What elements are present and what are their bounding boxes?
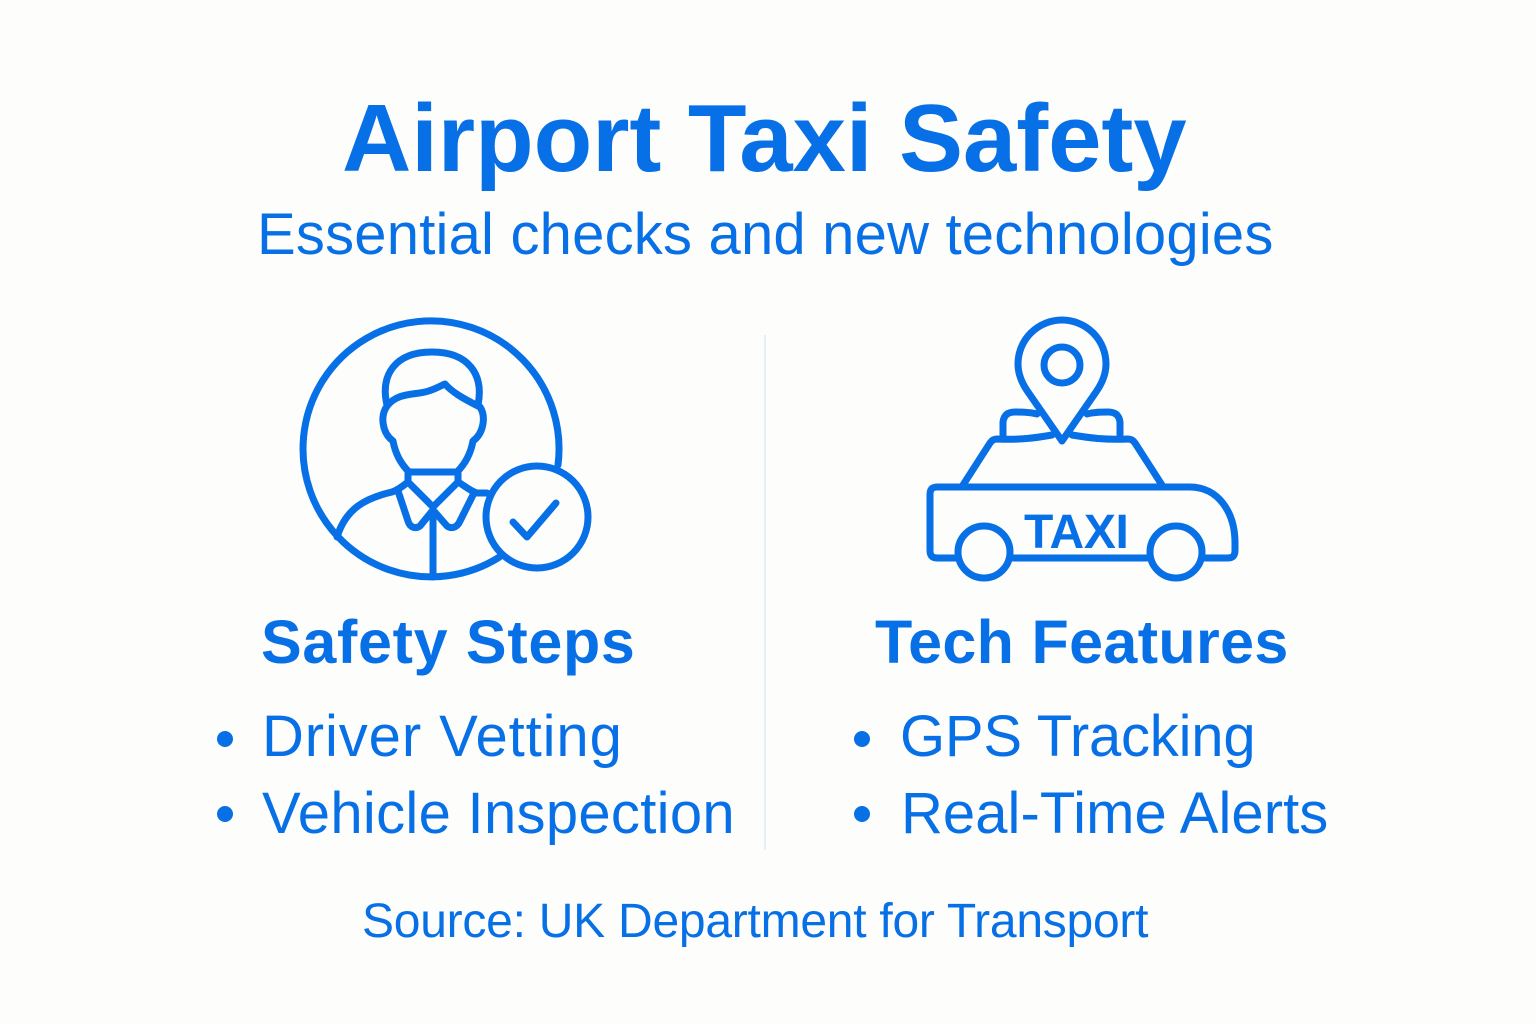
heading: tech features: Tech Features <box>875 608 1289 676</box>
subtitle: Essential checks and new technologies <box>257 202 1274 267</box>
bullet <box>854 806 870 822</box>
divider <box>764 335 766 850</box>
list: tech features <box>854 704 1328 846</box>
shirt placket <box>430 510 436 577</box>
left shoulder <box>337 482 408 537</box>
taxi label: TAXI <box>1024 506 1129 559</box>
front wheel <box>958 526 1010 578</box>
pin centre <box>1044 347 1080 383</box>
hair <box>385 352 479 405</box>
icon: taxi with location pin <box>926 316 1238 582</box>
item: driver vetting: Driver Vetting <box>262 704 623 769</box>
list: safety steps <box>217 704 735 846</box>
check badge <box>486 466 588 568</box>
neck and collar <box>408 472 458 507</box>
icon: driver with check badge <box>300 317 592 580</box>
heading: safety steps: Safety Steps <box>261 608 636 676</box>
title: Airport Taxi Safety <box>342 85 1187 192</box>
portrait circle <box>303 321 559 577</box>
rear wheel <box>1150 526 1202 578</box>
location pin <box>1018 320 1106 441</box>
collar flaps <box>398 491 474 528</box>
item: gps tracking: GPS Tracking <box>900 704 1255 769</box>
sill <box>1013 554 1147 562</box>
bullet <box>217 731 233 747</box>
car body <box>930 487 1235 558</box>
source: Source: UK Department for Transport <box>362 895 1148 948</box>
right roof sign <box>1087 412 1120 436</box>
bullet <box>854 731 870 747</box>
right shoulder <box>458 482 487 493</box>
hairline <box>387 384 480 407</box>
item: vehicle inspection: Vehicle Inspection <box>262 781 735 846</box>
bullet <box>217 806 233 822</box>
item: real-time alerts: Real-Time Alerts <box>901 781 1328 846</box>
face <box>383 406 483 472</box>
check mark <box>513 503 556 537</box>
left roof sign <box>1003 412 1037 436</box>
car roof <box>963 435 1162 485</box>
